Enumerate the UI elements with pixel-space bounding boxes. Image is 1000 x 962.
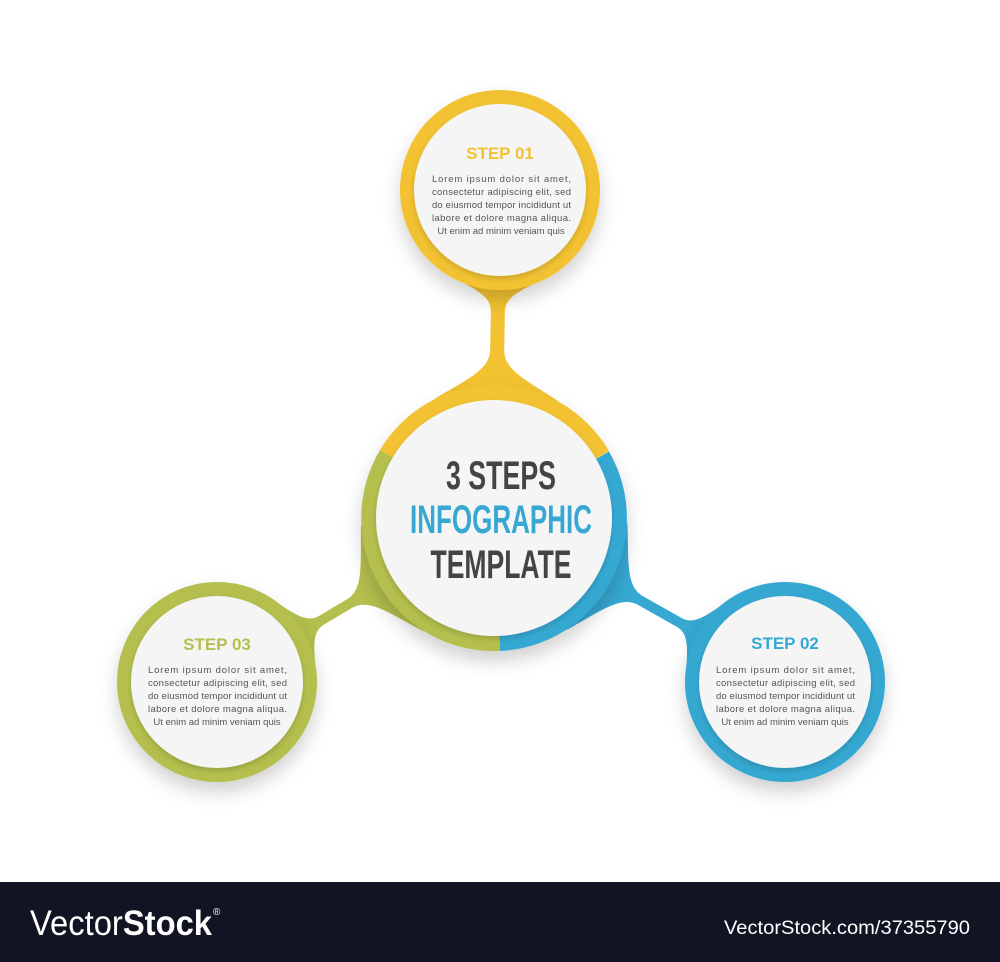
step 03 circle [117,582,317,782]
connector: top [434,283,560,401]
center title: 3 STEPS [446,454,556,498]
ring segment: blue [494,452,627,651]
step 03 circle: STEP 03 [183,635,251,654]
connector: right [566,522,734,690]
step 01 circle: consectetur adipiscing elit, sed [432,187,571,198]
footer bar: ® [213,907,221,918]
step 01 circle: STEP 01 [466,144,534,163]
ring segment: green [361,450,500,651]
center title: INFOGRAPHIC [410,498,592,542]
step 03 circle: do eiusmod tempor incididunt ut [148,691,287,702]
footer bar [0,882,1000,962]
connector: left [266,525,424,688]
step 02 circle: Lorem ipsum dolor sit amet, [716,665,855,676]
footer bar: VectorStock.com/37355790 [724,918,970,939]
center title: TEMPLATE [430,543,572,587]
center circle [361,385,627,651]
step 03 circle: labore et dolore magna aliqua. [148,704,287,715]
step 01 circle: do eiusmod tempor incididunt ut [432,200,571,211]
center title [410,454,592,587]
step 01 circle: Lorem ipsum dolor sit amet, [432,174,571,185]
step 01 circle: labore et dolore magna aliqua. [432,213,571,224]
step 03 circle: consectetur adipiscing elit, sed [148,678,287,689]
step 01 circle [400,90,600,290]
footer bar: VectorStock [30,904,212,943]
step 03 circle: Ut enim ad minim veniam quis [153,717,281,728]
step 02 circle: STEP 02 [751,634,819,653]
step 02 circle: consectetur adipiscing elit, sed [716,678,855,689]
step 02 circle: labore et dolore magna aliqua. [716,704,855,715]
ring segment: yellow [380,385,609,518]
step 01 circle: Ut enim ad minim veniam quis [437,226,565,237]
step 02 circle: Ut enim ad minim veniam quis [721,717,849,728]
step 03 circle: Lorem ipsum dolor sit amet, [148,665,287,676]
step 02 circle: do eiusmod tempor incididunt ut [716,691,855,702]
step 02 circle [685,582,885,782]
